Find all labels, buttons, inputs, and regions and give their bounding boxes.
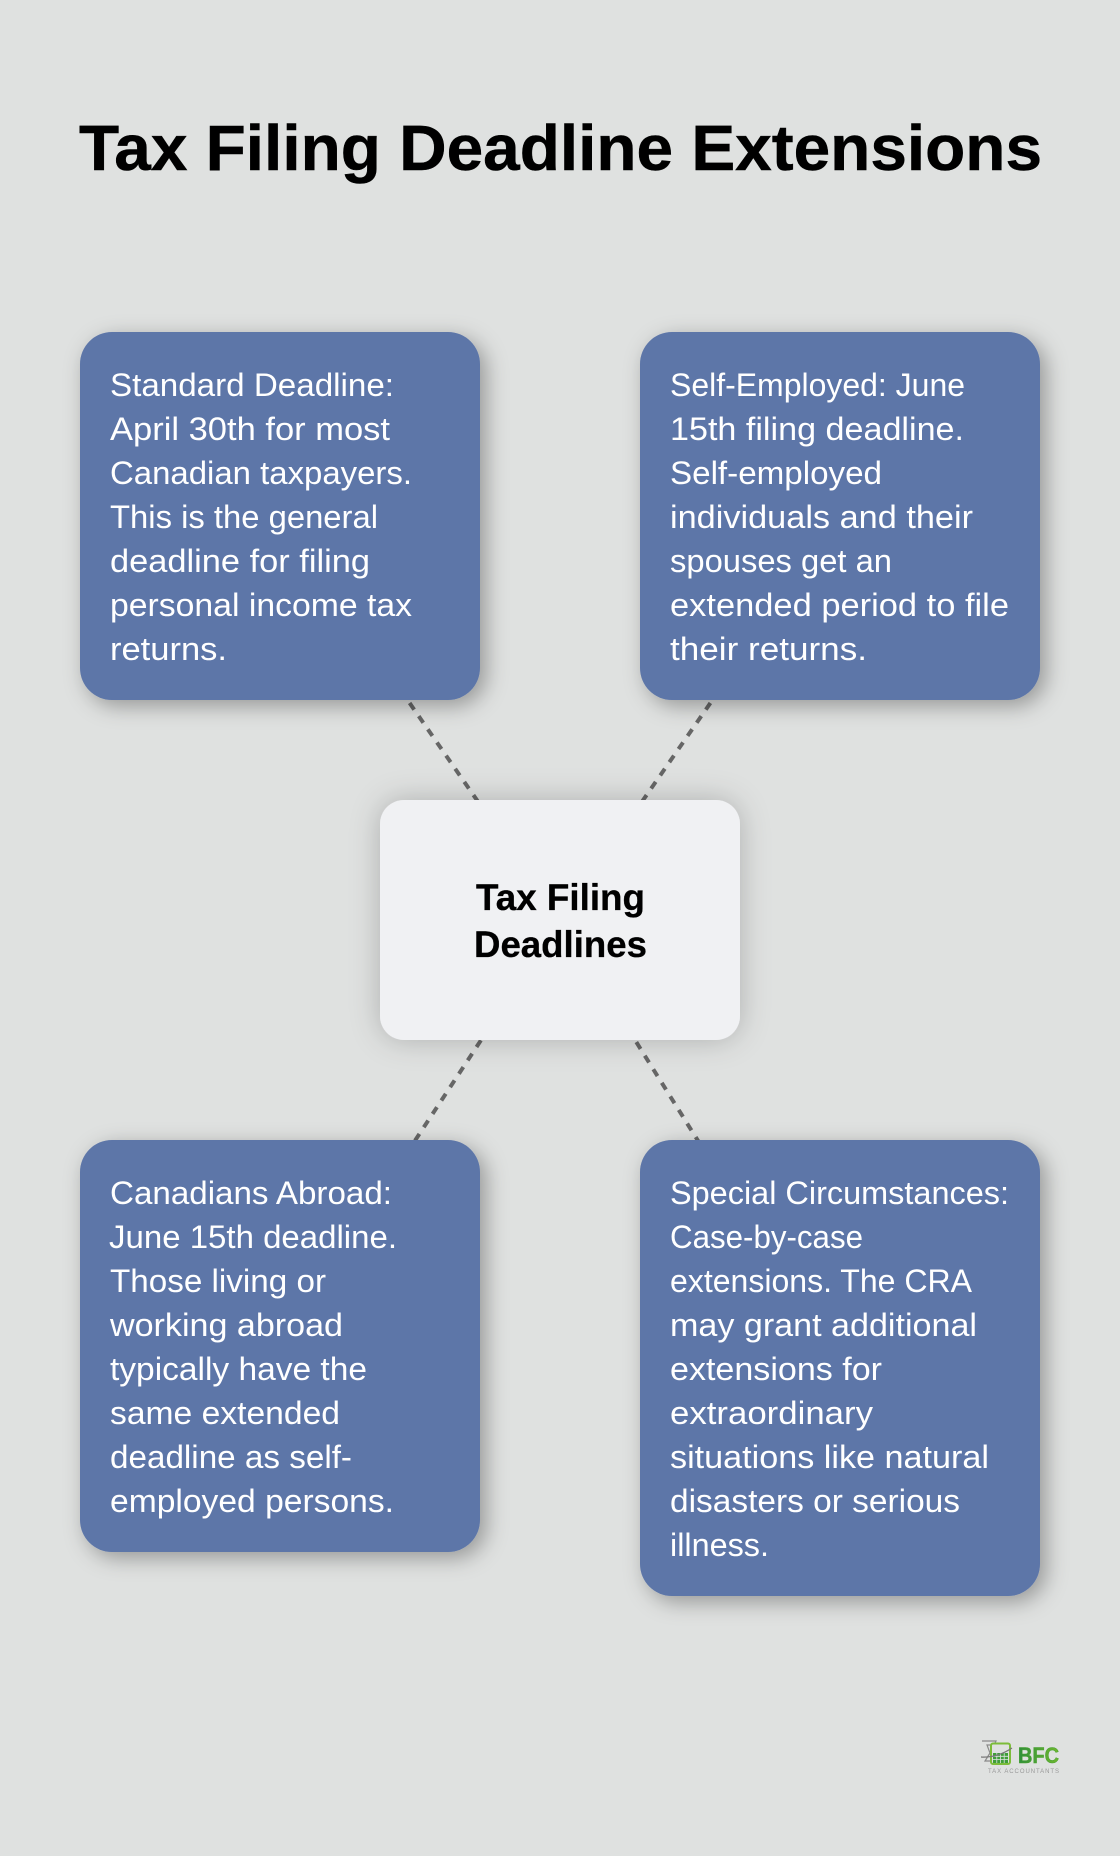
panel: special circumstances: [640, 1140, 1040, 1596]
panel: special circumstances: situations like natural: [670, 1439, 989, 1475]
panel: special circumstances: extensions. The CRA: [670, 1263, 973, 1299]
panel: standard deadline: Canadian taxpayers.: [110, 455, 412, 491]
logo: BFC Tax Accountants: BFC: [1018, 1743, 1059, 1768]
panel: canadians abroad: typically have the: [110, 1351, 367, 1387]
panel: standard deadline: returns.: [110, 631, 227, 667]
panel: standard deadline: deadline for filing: [110, 543, 370, 579]
panel: special circumstances: extraordinary: [670, 1395, 873, 1431]
panel: canadians abroad: working abroad: [109, 1307, 343, 1343]
panel: standard deadline: This is the general: [110, 499, 378, 535]
panel: canadians abroad: Canadians Abroad:: [110, 1175, 392, 1211]
panel: canadians abroad: June 15th deadline.: [109, 1219, 397, 1255]
panel: canadians abroad: deadline as self-: [110, 1439, 352, 1475]
panel: special circumstances: Case-by-case: [670, 1219, 863, 1255]
panel: self-employed: [640, 332, 1040, 700]
panel: center hub: Tax Filing: [476, 877, 645, 918]
panel: self-employed: Self-Employed: June: [670, 367, 965, 403]
panel: canadians abroad: employed persons.: [110, 1483, 394, 1519]
panel: self-employed: spouses get an: [670, 543, 892, 579]
panel: standard deadline: [80, 332, 480, 700]
panel: standard deadline: personal income tax: [110, 587, 412, 623]
panel: standard deadline: Standard Deadline:: [110, 367, 394, 403]
panel: special circumstances: illness.: [670, 1527, 769, 1563]
panel: self-employed: their returns.: [670, 631, 867, 667]
panel: canadians abroad: [80, 1140, 480, 1552]
panel: self-employed: individuals and their: [670, 499, 973, 535]
panel: center hub: Deadlines: [474, 924, 647, 965]
panel: center hub: [380, 800, 740, 1040]
panel: canadians abroad: same extended: [110, 1395, 340, 1431]
panel: special circumstances: Special Circumstances:: [670, 1175, 1009, 1211]
title: Tax Filing Deadline Extensions: [79, 112, 1042, 184]
panel: standard deadline: April 30th for most: [110, 411, 390, 447]
logo: BFC Tax Accountants: TAX ACCOUNTANTS: [988, 1769, 1059, 1775]
panel: special circumstances: extensions for: [670, 1351, 882, 1387]
panel: special circumstances: may grant additional: [670, 1307, 977, 1343]
panel: self-employed: 15th filing deadline.: [670, 411, 964, 447]
panel: self-employed: extended period to file: [670, 587, 1009, 623]
connector lines: [280, 516, 840, 1368]
panel: canadians abroad: Those living or: [110, 1263, 326, 1299]
panel: special circumstances: disasters or serious: [670, 1483, 960, 1519]
panel: self-employed: Self-employed: [670, 455, 882, 491]
logo: BFC Tax Accountants: [981, 1741, 1059, 1775]
